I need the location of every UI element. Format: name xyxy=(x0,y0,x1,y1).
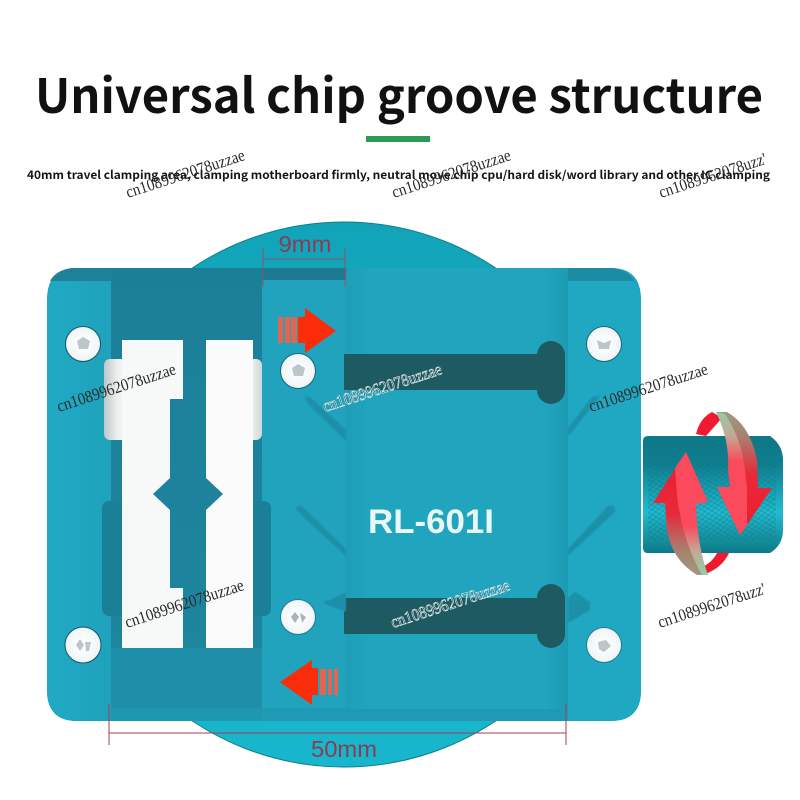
dark side lips xyxy=(102,501,126,616)
screw bottom right xyxy=(586,628,622,662)
slot head xyxy=(537,341,565,404)
right white slot xyxy=(206,340,253,648)
watermark row 1 xyxy=(123,145,769,202)
screw top right xyxy=(586,326,622,362)
50mm label: 50mm xyxy=(311,736,377,762)
centre sliding rail xyxy=(262,280,346,708)
fixture plate xyxy=(47,268,641,721)
upper travel slot xyxy=(344,341,565,404)
back band bottom xyxy=(700,553,729,574)
left white slot xyxy=(122,340,183,648)
groove floor below slots xyxy=(111,648,262,708)
arrow tail bars xyxy=(320,669,338,695)
slot channel xyxy=(344,598,549,634)
watermark: cn1089962078uzzae xyxy=(586,359,710,416)
left white lip xyxy=(104,359,130,440)
crease centre rail upper xyxy=(305,396,346,441)
watermark row 3 xyxy=(122,575,768,632)
watermark: cn1089962078uzzae xyxy=(388,575,512,632)
watermark: cn1089962078uzzae xyxy=(320,359,444,416)
title: Universal chip groove structure xyxy=(35,58,763,127)
right rail xyxy=(568,280,641,721)
left clamping groove xyxy=(111,268,262,721)
bottom red arrow xyxy=(280,660,338,705)
up arrow front face xyxy=(675,452,708,575)
arrow tail bars xyxy=(278,317,297,343)
down arrow outer band xyxy=(716,412,772,535)
shadow above centre rail xyxy=(262,268,346,280)
left rail xyxy=(47,281,111,721)
screw bottom left xyxy=(65,627,101,663)
watermark: cn1089962078uzzae xyxy=(122,575,246,632)
arrow head xyxy=(280,660,318,705)
up arrow outer band xyxy=(653,452,708,575)
9mm bracket xyxy=(263,248,345,287)
back band top xyxy=(696,412,722,436)
screw centre upper xyxy=(280,354,316,388)
rotating knob xyxy=(643,412,783,575)
crease right rail lower xyxy=(568,592,590,623)
slot head xyxy=(537,584,565,648)
down arrow front face xyxy=(716,412,747,535)
arrow head xyxy=(298,308,336,353)
watermark: cn1089962078uzz' xyxy=(655,579,768,632)
9mm label: 9mm xyxy=(278,231,332,257)
bottom strip under rails xyxy=(262,708,568,721)
groove bottom strip xyxy=(111,708,262,721)
screw centre lower xyxy=(280,600,316,634)
diagonal creases xyxy=(296,396,615,623)
slot channel xyxy=(344,354,549,390)
subtitle: 40mm travel clamping area, clamping motherboard firmly, neutral move chip cpu/hard disk/word library and other IC clamping xyxy=(27,167,770,183)
crease centre rail lower xyxy=(323,592,346,612)
round base disc xyxy=(72,222,616,767)
knob cylinder xyxy=(643,436,783,553)
screws xyxy=(65,326,622,663)
watermark row 2 xyxy=(54,359,710,416)
knurl texture xyxy=(648,449,776,540)
50mm bracket xyxy=(109,704,566,745)
top shadow band xyxy=(50,268,262,281)
dimension: 50mm xyxy=(109,704,566,762)
watermark: cn1089962078uzzae xyxy=(54,359,178,416)
dimension: 9mm xyxy=(263,231,345,287)
plate body xyxy=(47,268,641,721)
chip groove openings xyxy=(102,340,271,648)
right white lip xyxy=(245,359,262,440)
dark side lip right xyxy=(248,501,271,616)
green accent bar xyxy=(366,136,430,142)
top right shadow xyxy=(568,268,634,281)
centre panel xyxy=(346,268,568,709)
top red arrow xyxy=(278,308,336,353)
watermark: cn1089962078uzz' xyxy=(656,149,769,202)
crease centre rail middle xyxy=(296,506,346,556)
product model label: RL-601I xyxy=(368,503,494,541)
crease right rail upper xyxy=(568,396,600,436)
lower travel slot xyxy=(344,584,565,648)
screw top left xyxy=(66,326,100,362)
crease right rail middle xyxy=(568,506,615,556)
watermark: cn1089962078uzzae xyxy=(389,145,513,202)
watermark: cn1089962078uzzae xyxy=(123,145,247,202)
